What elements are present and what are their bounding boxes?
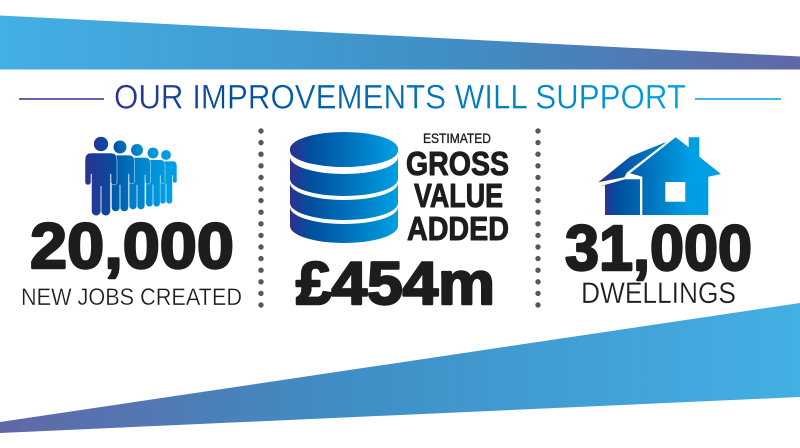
estimated gross value added label: ESTIMATED [423, 130, 491, 146]
estimated gross value added label: ADDED [407, 210, 509, 247]
icon: row of people [85, 136, 177, 216]
estimated gross value added label: VALUE [414, 177, 503, 214]
stat: 31,000 dwellings: 31,000 [565, 212, 752, 284]
heading: OUR IMPROVEMENTS WILL SUPPORT [114, 78, 686, 116]
stat: £454m: £454m [296, 250, 495, 317]
bottom gradient wedge [0, 303, 800, 433]
estimated gross value added label: GROSS [406, 145, 509, 182]
stat: 20,000 new jobs [21, 210, 242, 311]
stat: 20,000 new jobs: NEW JOBS CREATED [21, 284, 242, 311]
stat: 20,000 new jobs: 20,000 [30, 210, 234, 282]
icon: house [598, 137, 721, 215]
top gradient wedge [0, 16, 800, 70]
icon: database cylinder [290, 132, 398, 243]
divider: left dotted [258, 128, 264, 308]
estimated gross value added label [406, 130, 509, 247]
stat: 31,000 dwellings: DWELLINGS [581, 277, 736, 310]
divider: right dotted [535, 128, 541, 308]
